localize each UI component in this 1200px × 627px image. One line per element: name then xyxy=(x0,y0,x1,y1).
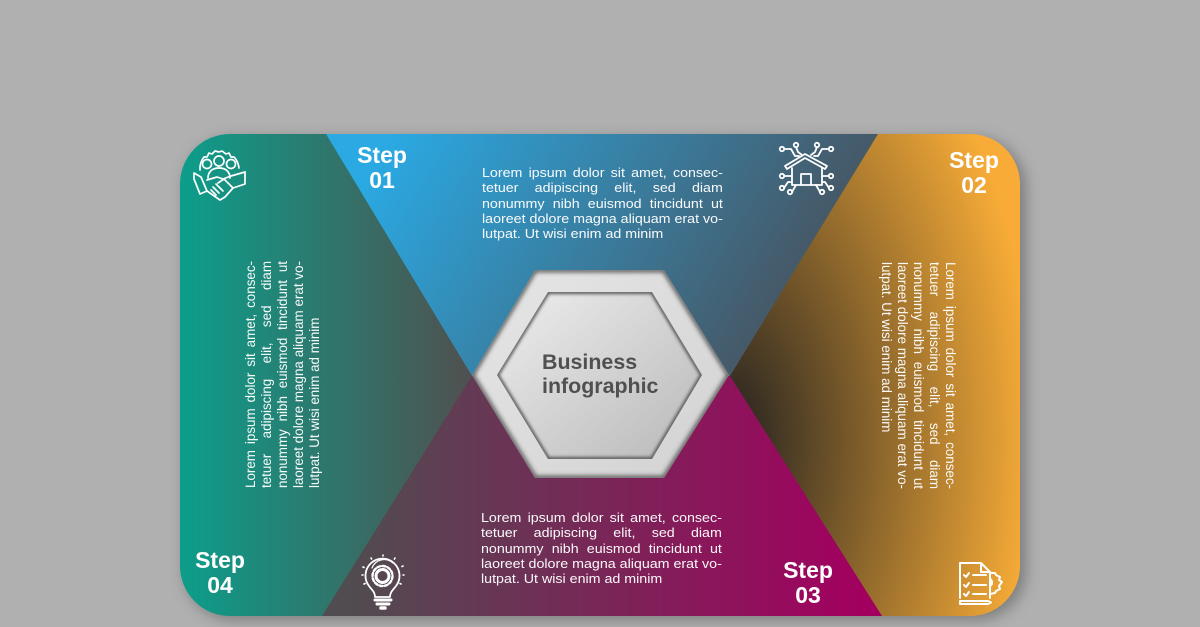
text block: step 02 rotated: laoreet dolore magna aliquam erat vo- xyxy=(895,262,910,489)
text block: step 01: nonummy nibh euismod tincidunt ut xyxy=(482,196,723,211)
step 01 label: 01 xyxy=(369,167,395,193)
step 03 label: 03 xyxy=(795,582,821,608)
panel: step 04 green xyxy=(180,134,473,616)
text block: step 04 rotated: nonummy nibh euismod tincidunt ut xyxy=(275,261,290,488)
text block: step 01: laoreet dolore magna aliquam erat vo- xyxy=(482,211,723,226)
step 02 label: Step xyxy=(949,147,999,173)
icon: team handshake gear xyxy=(194,151,245,200)
text block: step 03: Lorem ipsum dolor sit amet, consec- xyxy=(481,510,722,525)
text block: step 02 rotated xyxy=(879,262,958,489)
text block: step 04 rotated xyxy=(243,261,322,488)
step 04 label: 04 xyxy=(207,572,233,598)
text block: step 03: nonummy nibh euismod tincidunt ut xyxy=(481,541,722,556)
text block: step 04 rotated: laoreet dolore magna aliquam erat vo- xyxy=(291,261,306,488)
icon: lightbulb with gear xyxy=(362,555,404,608)
text block: step 03: tetuer adipiscing elit, sed diam xyxy=(481,525,722,540)
text block: step 03 xyxy=(481,510,722,586)
panel: step 03 purple xyxy=(322,376,882,616)
center title: Business xyxy=(542,350,637,374)
panel: step 02 orange xyxy=(729,134,1020,616)
icon: smart home circuit xyxy=(780,143,833,194)
step 04 label: Step xyxy=(195,547,245,573)
text block: step 02 rotated: nonummy nibh euismod tincidunt ut xyxy=(911,262,926,489)
text block: step 03: lutpat. Ut wisi enim ad minim xyxy=(481,571,662,586)
center hexagon xyxy=(472,270,729,478)
step 02 label: 02 xyxy=(961,172,987,198)
text block: step 01: tetuer adipiscing elit, sed diam xyxy=(482,180,723,195)
text block: step 04 rotated: tetuer adipiscing elit, sed diam xyxy=(259,261,274,488)
step 01 label: Step xyxy=(357,142,407,168)
infographic graphics xyxy=(178,132,1032,626)
text block: step 02 rotated: lutpat. Ut wisi enim ad minim xyxy=(879,262,894,432)
card panels xyxy=(180,134,1020,616)
text block: step 04 rotated: lutpat. Ut wisi enim ad minim xyxy=(307,318,322,488)
text block: step 01 xyxy=(482,165,723,241)
card shadow xyxy=(184,138,1026,620)
step 03 label xyxy=(783,557,833,608)
icon: checklist document xyxy=(960,563,1002,604)
text block: step 04 rotated: Lorem ipsum dolor sit amet, consec- xyxy=(243,261,258,488)
text block: step 02 rotated: tetuer adipiscing elit, sed diam xyxy=(927,262,942,489)
step 04 label xyxy=(195,547,245,598)
panel: step 01 blue xyxy=(326,134,878,376)
step 02 label xyxy=(949,147,999,198)
text block: step 01: Lorem ipsum dolor sit amet, consec- xyxy=(482,165,723,180)
text block: step 02 rotated: Lorem ipsum dolor sit amet, consec- xyxy=(943,262,958,489)
step 03 label: Step xyxy=(783,557,833,583)
text block: step 01: lutpat. Ut wisi enim ad minim xyxy=(482,226,663,241)
center title xyxy=(542,350,658,398)
step 01 label xyxy=(357,142,407,193)
text block: step 03: laoreet dolore magna aliquam erat vo- xyxy=(481,556,722,571)
center title: infographic xyxy=(542,374,658,398)
